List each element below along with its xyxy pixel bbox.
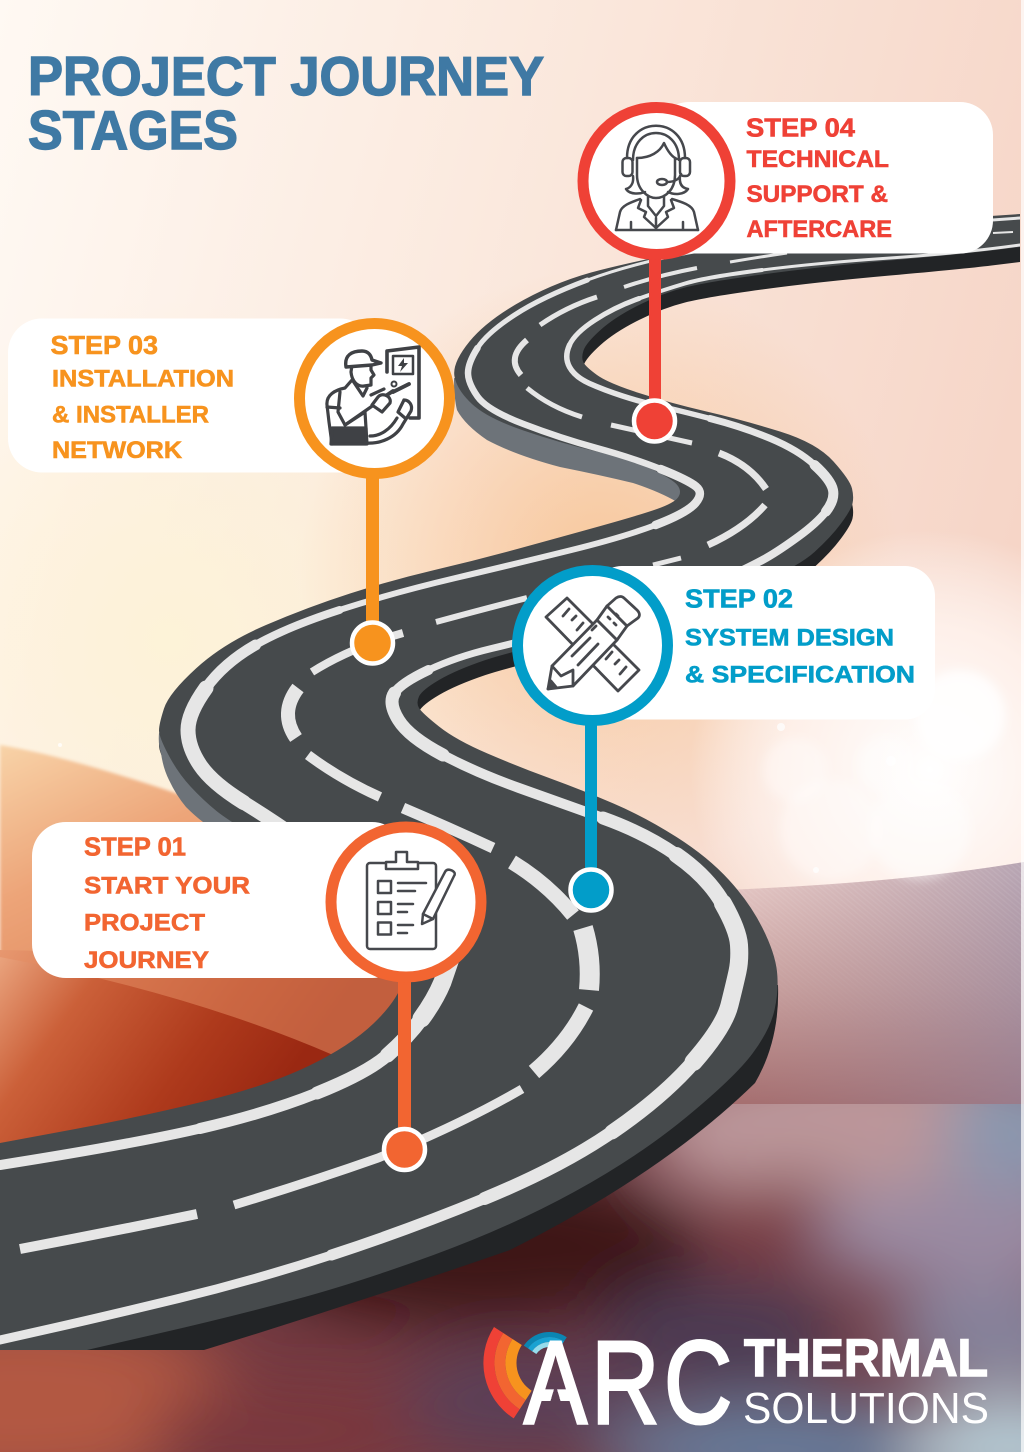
step 01 text: JOURNEY — [84, 947, 209, 974]
logo wordmark: ARC — [524, 1316, 732, 1448]
logo: thermal: THERMAL — [744, 1329, 988, 1388]
title: STAGES — [28, 99, 238, 161]
panel: step 01 — [32, 822, 481, 978]
step 04 text — [746, 114, 892, 243]
title — [28, 45, 544, 161]
marker: step 04 pin — [634, 250, 675, 442]
icon: ruler and pencil crossed — [546, 596, 639, 691]
logo: ARC Thermal Solutions — [483, 1327, 988, 1426]
step 03 text: & INSTALLER — [52, 402, 209, 428]
step 04 text: TECHNICAL — [746, 146, 889, 173]
marker: step 02 pin — [570, 715, 612, 910]
logo mark: cool arcs — [524, 1332, 567, 1354]
panel: step 04 — [583, 102, 993, 254]
step 02 text: SYSTEM DESIGN — [685, 624, 894, 652]
title: PROJECT JOURNEY — [28, 45, 544, 107]
step 01 text: START YOUR — [84, 872, 250, 900]
icon: support agent headset — [616, 126, 698, 230]
step 04 text: SUPPORT & — [746, 181, 888, 208]
logo: solutions: SOLUTIONS — [743, 1384, 989, 1433]
road centre dashes — [20, 232, 1013, 1249]
step 01 text — [84, 834, 250, 974]
panel: step 03 — [8, 318, 450, 474]
icon: installer at electrical panel — [327, 347, 419, 444]
circle: step 04 icon badge — [583, 108, 730, 254]
road edge line: lower — [0, 245, 1020, 1340]
step 03 text: STEP 03 — [50, 332, 158, 360]
step 04 text: STEP 04 — [746, 114, 856, 142]
circle: step 01 icon badge — [331, 827, 481, 977]
marker: step 01 pin — [384, 975, 425, 1170]
step 03 text — [50, 332, 234, 464]
logo mark: warm arcs — [483, 1327, 532, 1418]
step 02 text — [685, 586, 915, 688]
step 01 text: STEP 01 — [84, 834, 186, 862]
step 03 text: NETWORK — [52, 437, 183, 464]
road — [0, 214, 1020, 1365]
step 04 text: AFTERCARE — [746, 216, 892, 243]
panel: step 02 — [518, 566, 935, 720]
circle: step 03 icon badge — [300, 324, 450, 474]
step 02 text: STEP 02 — [685, 586, 793, 614]
marker: step 03 pin — [352, 470, 393, 664]
circle: step 02 icon badge — [518, 570, 668, 720]
step 02 text: & SPECIFICATION — [685, 662, 915, 688]
icon: clipboard checklist — [367, 852, 455, 949]
step 01 text: PROJECT — [84, 910, 205, 936]
step 03 text: INSTALLATION — [52, 366, 234, 392]
road edge line: upper — [0, 218, 1020, 1165]
